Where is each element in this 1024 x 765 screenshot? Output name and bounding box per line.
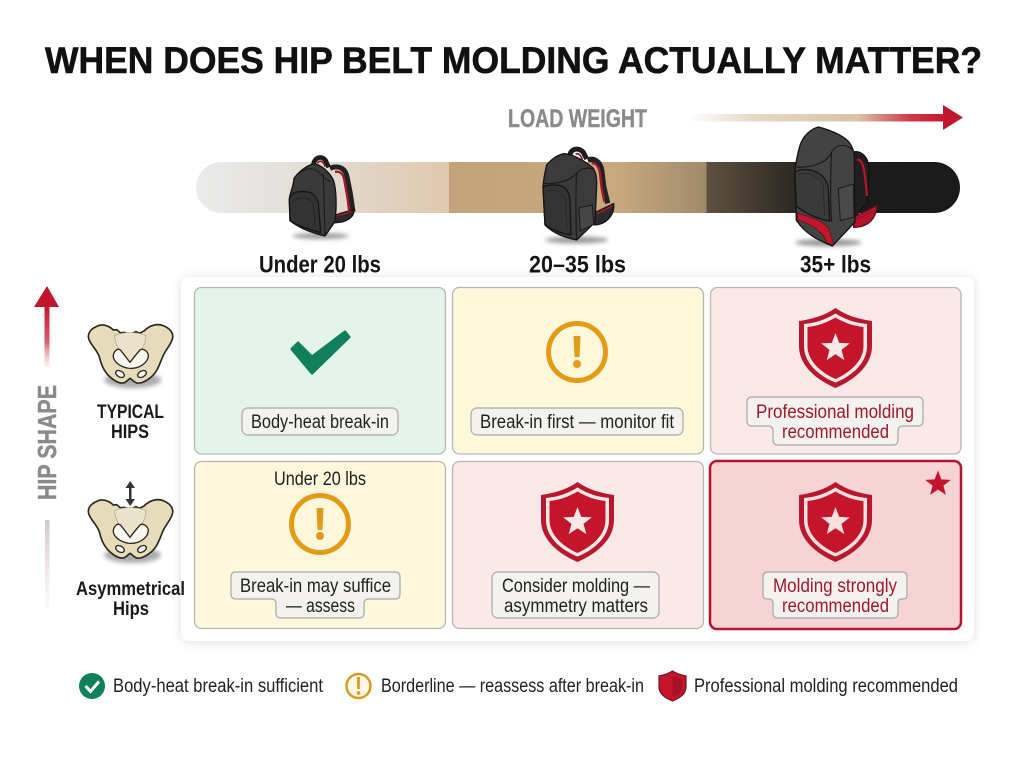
column label: 35+ lbs: 35+ lbs	[800, 252, 871, 278]
pill: consider molding: Consider molding —	[502, 576, 650, 597]
pill: molding strongly recommended	[763, 572, 907, 618]
icon: red shield	[799, 308, 872, 388]
icon: typical pelvis	[88, 325, 173, 388]
cell: typical 20-35 lbs	[452, 288, 704, 454]
label: asymmetrical hips: Asymmetrical	[76, 579, 185, 600]
pill: professional molding recommended: recommended	[782, 422, 889, 443]
panel: decision matrix	[181, 277, 974, 641]
icon: red shield	[799, 482, 872, 562]
pill: consider molding: asymmetry matters	[504, 596, 648, 617]
pill: consider molding	[492, 572, 659, 618]
icon: corner star	[925, 470, 951, 495]
hip shape axis heading: HIP SHAPE	[32, 385, 62, 500]
icon: asymmetrical pelvis	[88, 500, 173, 563]
legend item: body-heat break-in sufficient	[79, 673, 324, 699]
load weight gradient bar	[196, 162, 960, 213]
pill: molding strongly recommended: recommended	[782, 596, 889, 617]
icon: large backpack	[795, 127, 877, 246]
legend item: borderline: Borderline — reassess after break-in	[381, 676, 644, 697]
legend	[79, 671, 958, 701]
cell: asymmetrical under 20 lbs	[194, 462, 446, 628]
icon: asymmetry double arrow	[126, 481, 135, 506]
label: typical hips: HIPS	[111, 421, 149, 443]
pill: molding strongly recommended: Molding strongly	[773, 576, 897, 597]
legend item: professional molding recommended: Professional molding recommended	[694, 676, 958, 697]
pill: professional molding recommended	[747, 397, 923, 445]
icon: warning circle	[292, 496, 348, 552]
cell: typical under 20 lbs	[194, 288, 446, 454]
label: typical hips	[97, 401, 164, 443]
icon: medium backpack	[543, 149, 614, 243]
cell: typical 35+ lbs	[710, 288, 961, 454]
pill: break-in may suffice	[231, 572, 400, 618]
icon: warning circle	[548, 324, 606, 380]
label: typical hips: TYPICAL	[97, 401, 164, 423]
icon: small backpack	[289, 157, 354, 239]
label: asymmetrical hips	[76, 579, 185, 620]
pill: break-in first: Break-in first — monitor fit	[480, 412, 675, 433]
column label: under 20 lbs: Under 20 lbs	[259, 252, 381, 278]
icon: red shield	[541, 482, 614, 562]
hip shape axis lower line	[45, 520, 50, 608]
pill: break-in may suffice: — assess	[286, 596, 355, 617]
title: WHEN DOES HIP BELT MOLDING ACTUALLY MATTER?	[45, 40, 982, 81]
pill: body-heat break-in	[242, 408, 398, 435]
column label: 20–35 lbs: 20–35 lbs	[529, 252, 626, 278]
arrow: load weight direction	[688, 105, 963, 130]
icon: green check	[292, 332, 349, 373]
load weight axis heading: LOAD WEIGHT	[508, 105, 647, 133]
cell: asymmetrical 35+ lbs highlighted	[710, 461, 961, 629]
pill: body-heat break-in: Body-heat break-in	[251, 412, 389, 433]
pill: break-in may suffice: Break-in may suffice	[240, 576, 391, 597]
cell caption: under 20 lbs: Under 20 lbs	[274, 469, 366, 490]
legend item: professional molding recommended	[659, 671, 958, 701]
label: asymmetrical hips: Hips	[113, 599, 149, 620]
cell: asymmetrical 20-35 lbs	[452, 462, 704, 628]
legend item: borderline	[346, 674, 644, 698]
legend item: body-heat break-in sufficient: Body-heat break-in sufficient	[113, 676, 324, 697]
arrow: hip shape axis up	[34, 286, 59, 367]
pill: professional molding recommended: Professional molding	[756, 402, 914, 423]
